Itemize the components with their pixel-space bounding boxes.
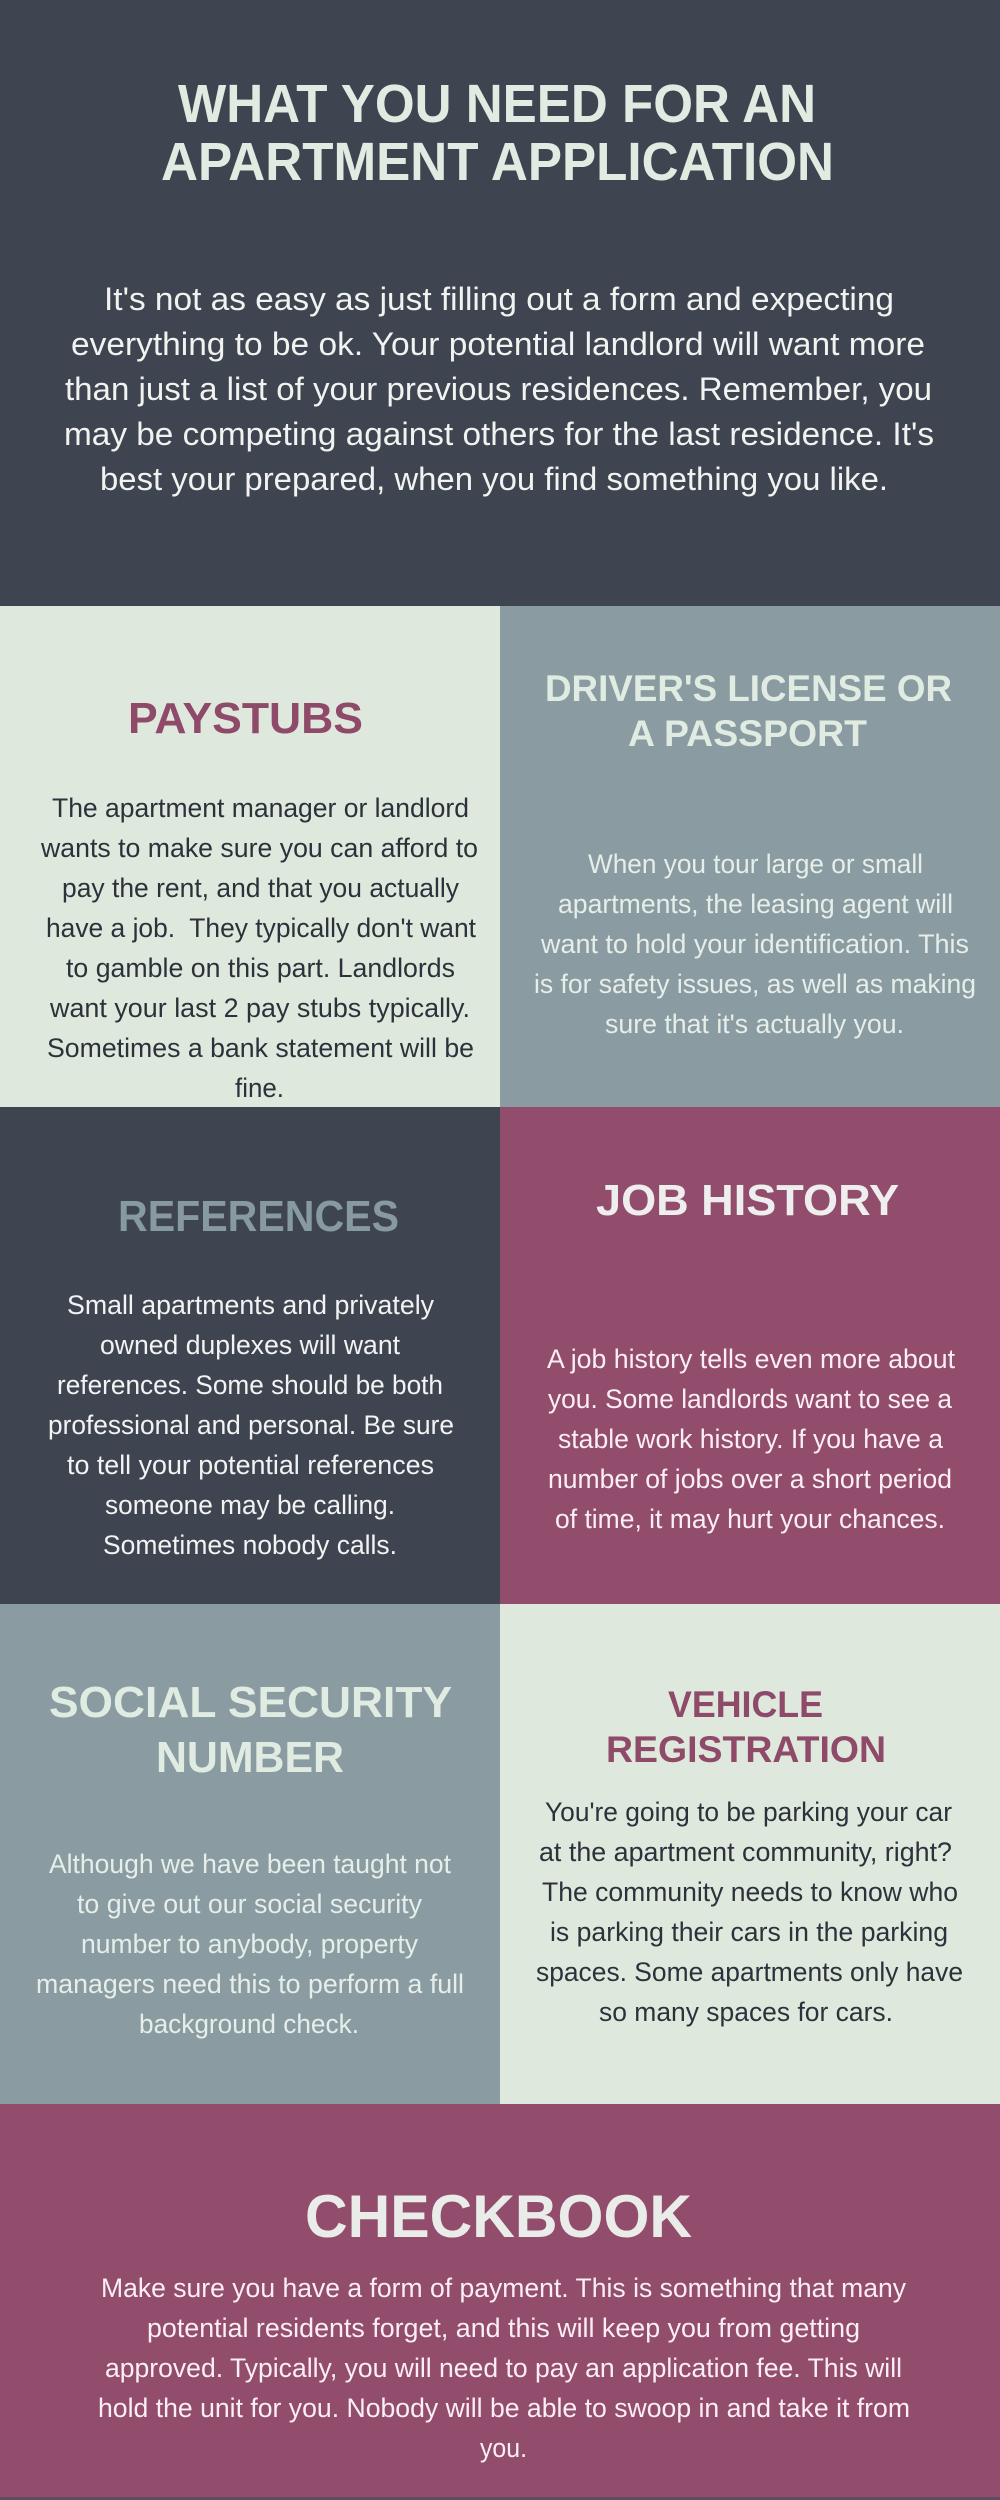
- panel: job history: [500, 1107, 1000, 1604]
- text: paystubs body: have a job. They typically don't want: [46, 913, 476, 943]
- text: paystubs body: Sometimes a bank statement will be: [47, 1033, 474, 1063]
- text: driver's license body: When you tour large or small: [588, 849, 923, 879]
- text: paystubs body: wants to make sure you can afford to: [40, 833, 478, 863]
- heading: job history: JOB HISTORY: [596, 1176, 899, 1225]
- text: checkbook body: potential residents forget, and this will keep you from getting: [147, 2313, 860, 2343]
- text: job history body: of time, it may hurt your chances.: [555, 1504, 945, 1534]
- intro text block: than just a list of your previous residences. Remember, you: [65, 371, 932, 407]
- text: social security body: background check.: [139, 2009, 359, 2039]
- text: job history body: number of jobs over a short period: [548, 1464, 952, 1494]
- text: vehicle registration body: [536, 1797, 963, 2027]
- text: job history body: A job history tells even more about: [547, 1344, 955, 1374]
- panel: references: [0, 1107, 500, 1604]
- text: checkbook body: approved. Typically, you will need to pay an application fee. This will: [105, 2353, 902, 2383]
- text: checkbook body: you.: [480, 2433, 527, 2463]
- text: vehicle registration body: spaces. Some apartments only have: [536, 1957, 963, 1987]
- heading: driver's license or a passport: A PASSPORT: [628, 713, 867, 754]
- heading: social security number: SOCIAL SECURITY: [49, 1678, 452, 1727]
- text: driver's license body: is for safety issues, as well as making: [534, 969, 976, 999]
- heading: driver's license or a passport: DRIVER'S LICENSE OR: [545, 668, 952, 709]
- text: social security body: [36, 1849, 464, 2039]
- intro text block: may be competing against others for the last residence. It's: [64, 416, 934, 452]
- heading: references: REFERENCES: [118, 1192, 399, 1241]
- heading: social security number: [49, 1678, 452, 1782]
- heading: vehicle registration: [606, 1684, 886, 1770]
- text: social security body: Although we have been taught not: [49, 1849, 451, 1879]
- text: checkbook body: hold the unit for you. Nobody will be able to swoop in and take it from: [98, 2393, 910, 2423]
- panel: paystubs: [0, 606, 500, 1107]
- text: references body: someone may be calling.: [105, 1490, 395, 1520]
- text: checkbook body: Make sure you have a form of payment. This is something that many: [101, 2273, 906, 2303]
- text: driver's license body: sure that it's actually you.: [605, 1009, 904, 1039]
- text: job history body: stable work history. If you have a: [558, 1424, 944, 1454]
- text: references body: professional and personal. Be sure: [48, 1410, 454, 1440]
- text: paystubs body: [40, 793, 478, 1103]
- text: references body: references. Some should be both: [57, 1370, 443, 1400]
- intro text block: It's not as easy as just filling out a form and expecting: [104, 281, 894, 317]
- heading: vehicle registration: VEHICLE: [668, 1684, 823, 1725]
- heading: paystubs: PAYSTUBS: [128, 694, 363, 743]
- text: checkbook body: [98, 2273, 910, 2463]
- text: social security body: to give out our social security: [77, 1889, 422, 1919]
- title: [161, 74, 834, 192]
- text: social security body: managers need this to perform a full: [36, 1969, 464, 1999]
- title: APARTMENT APPLICATION: [161, 132, 834, 192]
- text: paystubs body: The apartment manager or landlord: [52, 793, 469, 823]
- text: driver's license body: [534, 849, 976, 1039]
- text: vehicle registration body: You're going to be parking your car: [545, 1797, 952, 1827]
- text: paystubs body: want your last 2 pay stubs typically.: [49, 993, 470, 1023]
- text: paystubs body: fine.: [235, 1073, 284, 1103]
- text: paystubs body: to gamble on this part. Landlords: [66, 953, 455, 983]
- heading: vehicle registration: REGISTRATION: [606, 1729, 886, 1770]
- intro text block: [64, 281, 934, 497]
- text: references body: [48, 1290, 454, 1560]
- text: vehicle registration body: is parking their cars in the parking: [550, 1917, 948, 1947]
- text: job history body: [547, 1344, 955, 1534]
- text: references body: owned duplexes will want: [100, 1330, 400, 1360]
- panel: header introduction: [0, 0, 1000, 606]
- text: references body: Small apartments and privately: [67, 1290, 434, 1320]
- title: WHAT YOU NEED FOR AN: [178, 74, 816, 134]
- heading: driver's license or a passport: [545, 668, 952, 754]
- text: references body: Sometimes nobody calls.: [103, 1530, 397, 1560]
- panel: vehicle registration: [500, 1604, 1000, 2104]
- text: vehicle registration body: at the apartment community, right?: [539, 1837, 952, 1867]
- text: driver's license body: apartments, the leasing agent will: [558, 889, 953, 919]
- panel: driver's license or passport: [500, 606, 1000, 1107]
- heading: social security number: NUMBER: [156, 1733, 344, 1782]
- text: vehicle registration body: so many spaces for cars.: [599, 1997, 893, 2027]
- panel: checkbook: [0, 2104, 1000, 2500]
- heading: checkbook: CHECKBOOK: [305, 2183, 692, 2250]
- text: paystubs body: pay the rent, and that you actually: [62, 873, 459, 903]
- text: social security body: number to anybody, property: [81, 1929, 418, 1959]
- text: references body: to tell your potential references: [67, 1450, 434, 1480]
- intro text block: everything to be ok. Your potential landlord will want more: [71, 326, 925, 362]
- text: vehicle registration body: The community needs to know who: [542, 1877, 958, 1907]
- panel: social security number: [0, 1604, 500, 2104]
- text: job history body: you. Some landlords want to see a: [548, 1384, 953, 1414]
- text: driver's license body: want to hold your identification. This: [540, 929, 969, 959]
- intro text block: best your prepared, when you find something you like.: [100, 461, 888, 497]
